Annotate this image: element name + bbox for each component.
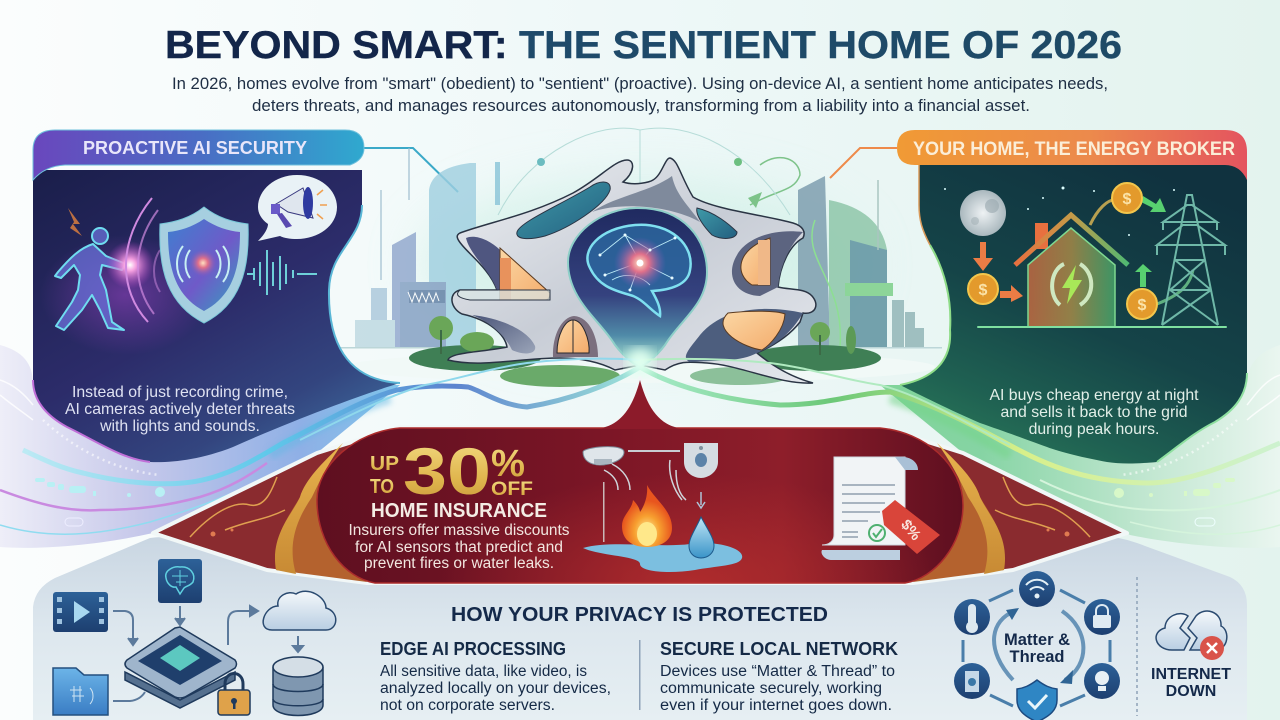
arrows xyxy=(973,196,1193,304)
icon: edge chip xyxy=(125,627,236,708)
icon: film xyxy=(53,592,108,632)
stars xyxy=(944,186,1175,236)
privacy heading: HOW YOUR PRIVACY IS PROTECTED xyxy=(451,604,828,626)
text block: edge AI processing: not on corporate servers. xyxy=(380,697,555,714)
brain chamber xyxy=(568,208,707,367)
panel text xyxy=(65,384,295,435)
bulb glyph xyxy=(1095,671,1109,691)
thermometer glyph xyxy=(966,604,978,633)
left gold swooshes xyxy=(190,443,367,582)
text block: secure local network: Devices use “Matter & Thread” to xyxy=(660,663,895,680)
glowing brain xyxy=(587,225,691,316)
headline: up to 30% off: TO xyxy=(370,476,394,498)
network arcs xyxy=(498,128,790,380)
right lower cavity xyxy=(686,309,803,362)
title: BEYOND SMART: THE SENTIENT HOME OF 2026 xyxy=(165,24,1122,67)
icon: smoke detector and sensor xyxy=(583,443,718,542)
icon: intruder figure xyxy=(55,208,126,330)
panel text: Instead of just recording crime, xyxy=(72,384,288,401)
icon: database xyxy=(273,657,323,716)
light streams from house xyxy=(23,348,1280,484)
panel header xyxy=(33,130,364,180)
panel edge highlights xyxy=(33,205,400,462)
panel text xyxy=(989,387,1199,438)
text block: secure local network: even if your internet goes down. xyxy=(660,697,892,714)
red inner panel xyxy=(317,428,963,583)
icon: coins: $ xyxy=(1138,297,1147,314)
red outer wedge xyxy=(153,378,1127,583)
lock glyph xyxy=(1093,605,1111,628)
background waves: right xyxy=(880,345,1280,548)
diagram: matter and thread ring xyxy=(954,571,1120,720)
left arch cavity xyxy=(553,316,598,357)
intro text: deters threats, and manages resources autonomously, transforming from a liability into a financial asset. xyxy=(252,96,1030,115)
panel text: and sells it back to the grid xyxy=(1000,404,1188,421)
text block: edge AI processing: analyzed locally on your devices, xyxy=(380,680,611,697)
headline: up to 30% off: 30 xyxy=(403,434,491,508)
house shell xyxy=(448,158,816,383)
panel: insurance xyxy=(151,380,1129,585)
icon: cloud xyxy=(263,591,336,630)
icon: coins: $ xyxy=(979,282,988,299)
ground line xyxy=(977,326,1227,328)
icon: coins xyxy=(968,183,1157,319)
icon: power pylon xyxy=(1157,195,1225,325)
icon: water puddle xyxy=(583,543,742,572)
right gold swooshes xyxy=(913,443,1090,582)
icon: policy document with discount tag: $% xyxy=(897,516,924,544)
panel text: AI buys cheap energy at night xyxy=(989,387,1199,404)
trees and islands xyxy=(409,316,881,387)
icon: speech bubble megaphone xyxy=(258,175,337,241)
subhead: HOME INSURANCE xyxy=(371,500,547,522)
internet down label xyxy=(1151,666,1231,700)
panel text: prevent fires or water leaks. xyxy=(364,555,554,572)
internet down label: INTERNET xyxy=(1151,666,1231,683)
teal skylights xyxy=(517,182,610,239)
sound arcs xyxy=(126,198,160,322)
panel body xyxy=(900,165,1247,464)
panel text xyxy=(348,522,570,572)
left upper cavity xyxy=(466,237,548,292)
text block: edge AI processing: All sensitive data, like video, is xyxy=(380,663,587,680)
futuristic house xyxy=(448,158,816,383)
panel background xyxy=(33,537,1247,720)
panel text: with lights and sounds. xyxy=(99,418,260,435)
panel text: during peak hours. xyxy=(1029,421,1159,438)
orange windows xyxy=(500,248,550,300)
ring label xyxy=(1004,631,1070,666)
panel: central sentient home illustration xyxy=(338,128,942,387)
panel body xyxy=(33,170,400,462)
flow arrows xyxy=(113,606,303,701)
icon: broken cloud internet down xyxy=(1156,611,1227,660)
balcony xyxy=(458,290,550,300)
right upper cavity xyxy=(732,231,803,296)
icon: waveform xyxy=(247,250,317,295)
icon: padlock xyxy=(218,674,250,715)
icon: water drop xyxy=(689,517,714,558)
purple glow xyxy=(40,235,210,355)
icon: house xyxy=(1015,215,1128,327)
ground xyxy=(338,347,942,383)
headline: up to 30% off: % xyxy=(491,443,525,485)
wifi glyph xyxy=(1026,580,1048,598)
background waves: left xyxy=(0,345,400,548)
text block: edge AI processing: EDGE AI PROCESSING xyxy=(380,639,566,659)
icon: moon xyxy=(960,190,1006,236)
panel header xyxy=(897,130,1247,180)
shield check xyxy=(1017,680,1057,720)
left lower cavity xyxy=(472,315,535,353)
panel header: YOUR HOME, THE ENERGY BROKER xyxy=(913,139,1235,160)
icon: coins: $ xyxy=(1123,191,1132,208)
panel edge highlights xyxy=(900,165,1247,462)
city skyline left xyxy=(355,148,500,347)
icon: brain box xyxy=(158,559,202,603)
connector lines xyxy=(362,148,897,192)
headline: up to 30% off: UP xyxy=(370,453,399,475)
text block: secure local network xyxy=(660,639,898,714)
intro text: In 2026, homes evolve from "smart" (obedient) to "sentient" (proactive). Using on-device AI, a sentient home anticipates needs, xyxy=(172,74,1108,93)
sensor glyph xyxy=(965,671,979,692)
text block: secure local network: SECURE LOCAL NETWORK xyxy=(660,639,898,659)
headline: up to 30% off: OFF xyxy=(491,479,533,500)
panel text: AI cameras actively deter threats xyxy=(65,401,295,418)
panel: privacy xyxy=(33,537,1247,720)
text block: secure local network: communicate securely, working xyxy=(660,680,882,697)
panel text: for AI sensors that predict and xyxy=(355,539,563,556)
icon: folder xyxy=(53,668,108,715)
intro text xyxy=(172,74,1108,115)
headline: up to 30% off xyxy=(370,434,533,508)
panel: proactive AI security xyxy=(33,130,400,462)
impact glow xyxy=(106,241,154,289)
internet down label: DOWN xyxy=(1166,683,1216,700)
panel header: PROACTIVE AI SECURITY xyxy=(83,137,308,158)
icon: flame xyxy=(622,485,672,547)
ring label: Thread xyxy=(1009,648,1065,666)
icon: policy document with discount tag xyxy=(821,457,940,560)
panel: your home, the energy broker xyxy=(897,130,1247,464)
roof shadow xyxy=(592,176,700,222)
icon: shield xyxy=(160,207,248,323)
ring label: Matter & xyxy=(1004,631,1070,649)
text block: edge AI processing xyxy=(380,639,611,714)
city skyline right xyxy=(748,158,924,347)
panel text: Insurers offer massive discounts xyxy=(348,522,570,539)
central glow xyxy=(420,180,860,350)
